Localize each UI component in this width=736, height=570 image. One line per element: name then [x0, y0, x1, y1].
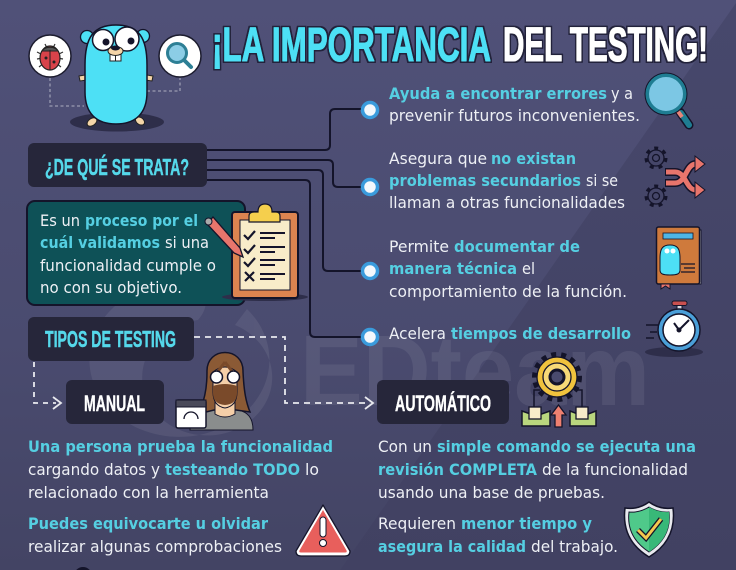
icon: magnifier badge — [159, 35, 201, 77]
text: manual description: lo — [305, 460, 319, 479]
text: documentar: el — [522, 259, 535, 278]
panel: definition: cuál validamos — [40, 233, 160, 252]
icon: shield with check — [624, 502, 674, 557]
panel: definition: proceso por el — [85, 211, 198, 230]
text: problemas secundarios: si se — [586, 171, 618, 190]
text: automatic description: simple comando se ejecuta una — [437, 437, 696, 456]
text: tiempos de desarrollo — [389, 324, 631, 343]
icon: developer with window — [176, 352, 253, 430]
text: automatic description: Con un — [378, 437, 432, 456]
text: encontrar errores: prevenir futuros inconvenientes. — [389, 106, 640, 125]
panel: definition: no con su objetivo. — [40, 278, 182, 297]
connector lines to benefits — [207, 109, 364, 337]
text: encontrar errores — [389, 84, 640, 125]
panel: definition: si una — [165, 233, 209, 252]
panel: definition — [27, 201, 245, 305]
panel: definition: funcionalidad cumple o — [40, 256, 216, 275]
arrow: to automatico — [194, 337, 373, 409]
text: manual warning: realizar algunas comprobaciones — [28, 537, 282, 556]
text: manual description: testeando TODO — [165, 460, 300, 479]
text: automatic description: usando una base de pruebas. — [378, 483, 605, 502]
text: manual warning: Puedes equivocarte u olvidar — [28, 514, 268, 533]
icon: large magnifier — [645, 73, 689, 125]
heading: de qué se trata: ¿DE QUÉ SE TRATA? — [45, 153, 189, 180]
heading: tipos de testing: TIPOS DE TESTING — [45, 326, 176, 352]
text: tiempos de desarrollo: tiempos de desarrollo — [451, 324, 631, 343]
title: ¡LA IMPORTANCIA — [212, 19, 491, 72]
icon: book with gopher — [656, 227, 701, 289]
text: documentar — [389, 237, 627, 301]
text: encontrar errores: Ayuda a encontrar errores — [389, 84, 607, 103]
text: problemas secundarios: no existan — [491, 149, 576, 168]
arrow: to manual — [34, 362, 61, 409]
bullet dots — [362, 102, 378, 344]
text: manual description — [28, 437, 333, 502]
text: documentar: comportamiento de la función. — [389, 282, 627, 301]
dashed connectors from mascot — [50, 78, 180, 106]
text: manual description: cargando datos y — [28, 460, 160, 479]
text: manual description: relacionado con la herramienta — [28, 483, 269, 502]
text: problemas secundarios — [389, 149, 625, 212]
watermark: EDteam logo: EDteam — [300, 315, 650, 427]
icon: gears and shuffle arrows — [646, 148, 705, 206]
text: encontrar errores: y a — [611, 84, 633, 103]
text: documentar: manera técnica — [389, 259, 517, 278]
heading: de qué se trata — [28, 143, 207, 187]
text: automatic quality — [378, 514, 618, 556]
text: automatic quality: menor tiempo y — [461, 514, 593, 533]
text: problemas secundarios: Asegura que — [389, 149, 487, 168]
text: manual description: Una persona prueba la funcionalidad — [28, 437, 333, 456]
icon: warning triangle — [296, 505, 350, 556]
icon: gear with books — [522, 354, 596, 427]
panel: definition: Es un — [40, 211, 80, 230]
label: automatico — [377, 380, 509, 424]
label: automatico: AUTOMÁTICO — [395, 391, 491, 416]
partial icon at bottom edge — [74, 567, 92, 570]
text: tiempos de desarrollo: Acelera — [389, 324, 446, 343]
text: documentar: documentar de — [454, 237, 580, 256]
heading: tipos de testing — [28, 317, 194, 361]
icon: bug badge — [29, 35, 71, 77]
text: documentar: Permite — [389, 237, 449, 256]
text: automatic description — [378, 437, 696, 502]
watermark: EDteam logo — [89, 283, 650, 437]
icon: clipboard with pencil — [205, 204, 308, 301]
text: problemas secundarios: problemas secundarios — [389, 171, 581, 190]
icon: stopwatch — [645, 301, 703, 357]
text: automatic quality: Requieren — [378, 514, 456, 533]
label: manual: MANUAL — [84, 391, 145, 416]
text: automatic quality: del trabajo. — [531, 537, 618, 556]
label: manual — [66, 380, 164, 424]
text: automatic description: de la funcionalidad — [542, 460, 688, 479]
text: automatic quality: asegura la calidad — [378, 537, 526, 556]
text: manual warning — [28, 514, 282, 556]
text: problemas secundarios: llaman a otras funcionalidades — [389, 193, 625, 212]
mascot: gopher — [70, 25, 164, 132]
text: automatic description: revisión COMPLETA — [378, 460, 538, 479]
